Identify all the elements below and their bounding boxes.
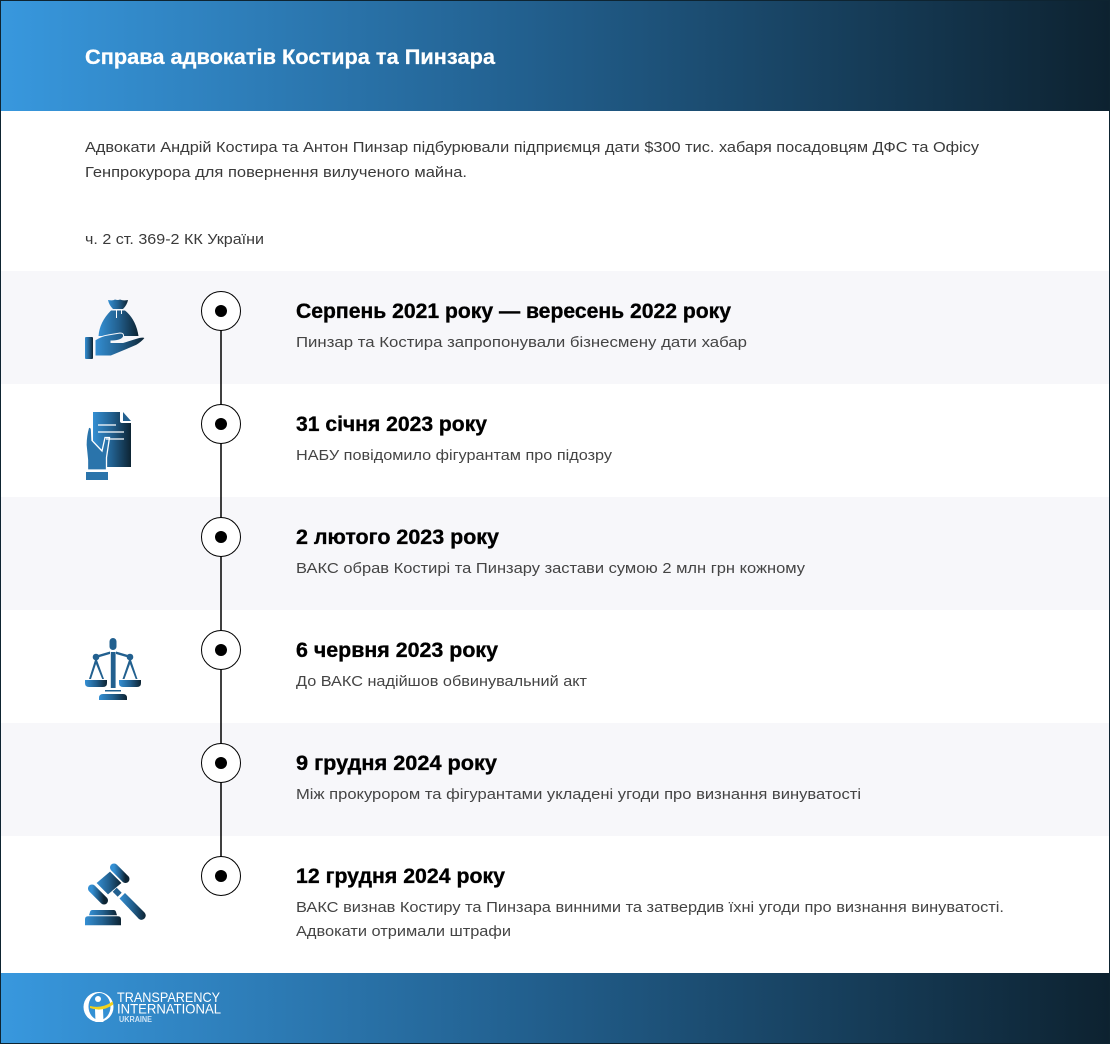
icon: money bag on hand (85, 300, 145, 359)
event 2 (296, 413, 613, 464)
marker 4 (202, 630, 240, 670)
event 6: 12 грудня 2024 року (296, 865, 505, 888)
event 1 (296, 300, 747, 351)
event 5 (296, 752, 861, 803)
marker 1 (202, 292, 240, 330)
event 6: Адвокати отримали штрафи (296, 923, 511, 940)
intro text (85, 139, 980, 181)
legal article reference: ч. 2 ст. 369-2 КК України (85, 231, 264, 248)
event 5: Між прокурором та фігурантами укладені угоди про визнання винуватості (296, 786, 861, 803)
event 1: Серпень 2021 року — вересень 2022 року (296, 300, 731, 323)
event 2: НАБУ повідомило фігурантам про підозру (296, 447, 613, 464)
event 3: 2 лютого 2023 року (296, 526, 499, 549)
event 5: 9 грудня 2024 року (296, 752, 497, 775)
event 2: 31 січня 2023 року (296, 413, 487, 436)
event 4 (296, 639, 587, 690)
event 1: Пинзар та Костира запропонували бізнесмену дати хабар (296, 334, 747, 351)
event 6: ВАКС визнав Костиру та Пинзара винними та затвердив їхні угоди про визнання винуватості. (296, 899, 1004, 916)
icon: document in hand (86, 412, 131, 480)
marker 6 (202, 856, 240, 896)
marker 2 (202, 404, 240, 444)
row backgrounds (0, 271, 1110, 836)
event 3 (296, 526, 806, 577)
header band (0, 0, 1110, 111)
logo: Transparency International Ukraine: UKRAINE (119, 1015, 153, 1024)
marker 3 (202, 518, 240, 556)
footer band (0, 973, 1110, 1044)
icon: scales of justice (85, 638, 141, 700)
icon: gavel (85, 868, 146, 925)
intro text: Генпрокурора для повернення вилученого майна. (85, 164, 467, 181)
timeline axis (202, 292, 240, 896)
intro text: Адвокати Андрій Костира та Антон Пинзар підбурювали підприємця дати $300 тис. хабаря посадовцям ДФС та Офісу (85, 139, 980, 156)
event 6 (296, 865, 1004, 940)
event 4: До ВАКС надійшов обвинувальний акт (296, 673, 587, 690)
title: Справа адвокатів Костира та Пинзара (85, 46, 495, 69)
logo: Transparency International Ukraine: INTERNATIONAL (117, 1000, 221, 1016)
logo: Transparency International Ukraine: TRANSPARENCY (117, 989, 221, 1005)
event 4: 6 червня 2023 року (296, 639, 498, 662)
logo: Transparency International Ukraine (84, 989, 221, 1024)
marker 5 (202, 744, 240, 782)
event 3: ВАКС обрав Костирі та Пинзару застави сумою 2 млн грн кожному (296, 560, 806, 577)
